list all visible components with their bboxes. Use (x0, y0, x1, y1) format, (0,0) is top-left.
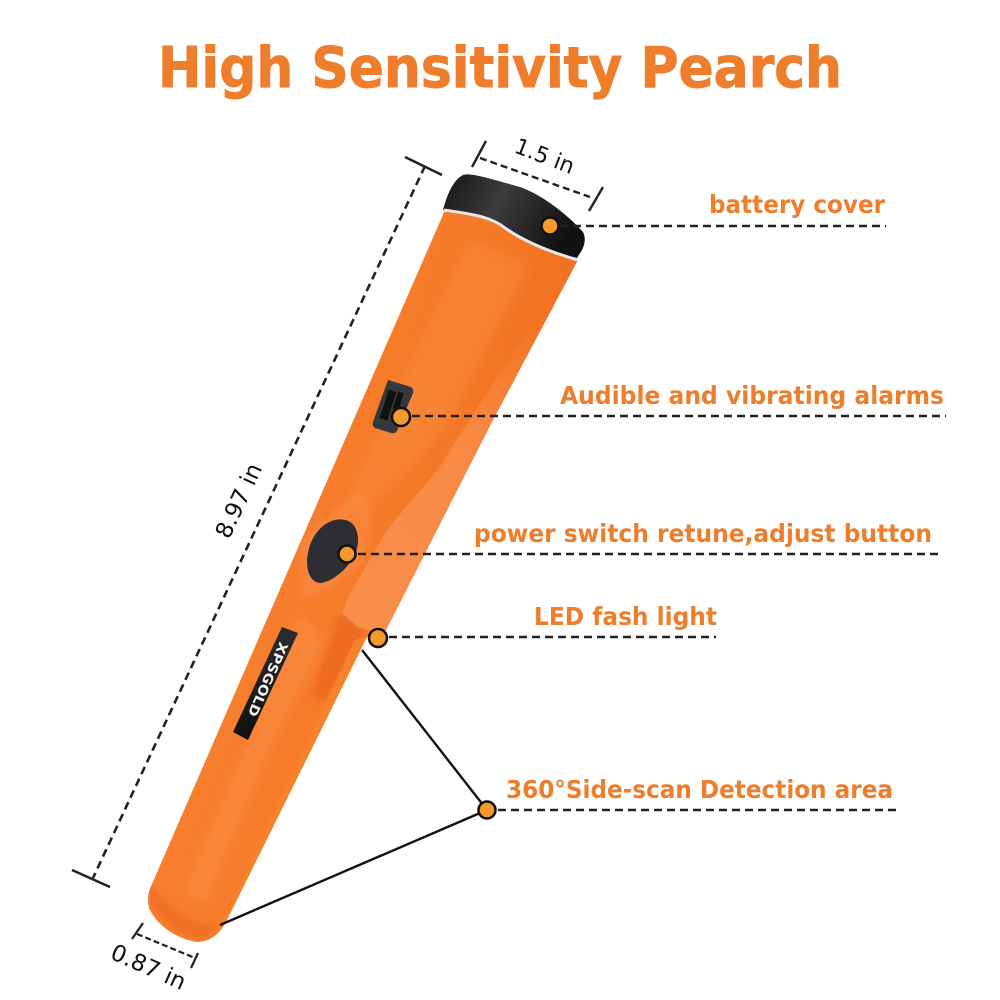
callout: battery cover (542, 190, 886, 234)
callout: alarms (392, 381, 946, 426)
callout: detection area: 360°Side-scan Detection area (506, 775, 893, 804)
callout: power switch: power switch retune,adjust button (474, 519, 932, 548)
power button (307, 519, 358, 583)
dimension: width 0.87 in: 0.87 in (107, 940, 190, 996)
cover metal ring (444, 210, 578, 260)
callout: power switch (338, 519, 940, 562)
side fin (342, 350, 528, 631)
lower edge stripe (218, 637, 367, 932)
body shading (149, 240, 578, 938)
button recess (300, 490, 372, 600)
battery cover (443, 174, 585, 258)
device body (148, 210, 578, 942)
callout: alarms: Audible and vibrating alarms (560, 381, 944, 410)
dimension: width 1.5 in: 1.5 in (511, 134, 578, 180)
dimension: length 8.97 in: 8.97 in (211, 459, 268, 543)
callout: detection area (220, 650, 897, 925)
callout: LED flash light: LED fash light (534, 602, 717, 631)
dimension: length 8.97 in (72, 157, 442, 887)
pinpointer device (148, 174, 585, 942)
brand label (233, 627, 298, 740)
dimension: width 1.5 in (472, 134, 603, 211)
detection area lines (220, 650, 487, 925)
callout: battery cover: battery cover (709, 190, 886, 219)
brand label: XPSGOLD (244, 639, 290, 719)
title: High Sensitivity Pearch (158, 36, 842, 101)
alarm speaker slot (373, 380, 413, 433)
callout: LED flash light (369, 602, 717, 647)
